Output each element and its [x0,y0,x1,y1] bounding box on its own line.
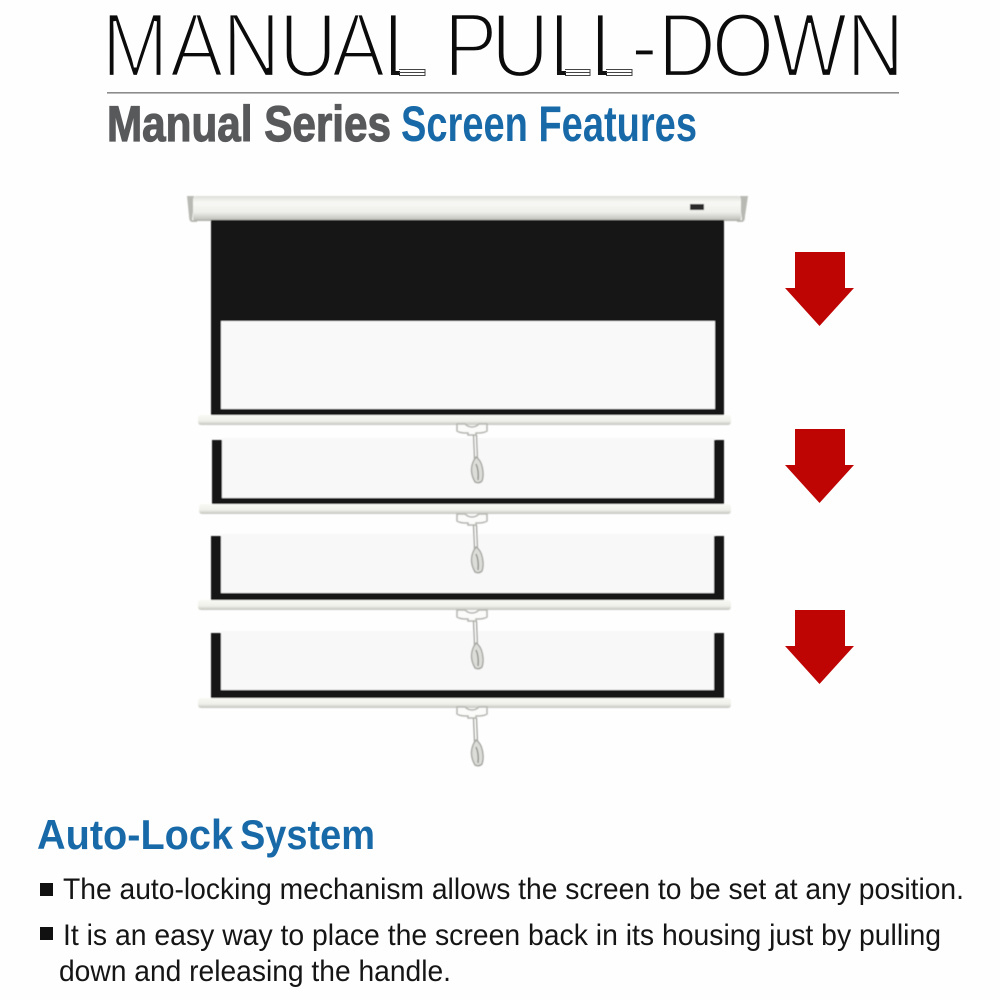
bullet 2: It is an easy way to place the screen back in its housing just by pulling [63,919,941,952]
arrow 3 [785,610,854,684]
subtitle [107,96,697,152]
bottom bar 2 [199,504,731,514]
white viewing surface [221,321,715,409]
arrow 1 [785,252,854,326]
arrow 2 [785,429,854,503]
screen section 4 [211,631,724,698]
bullet 1: The auto-locking mechanism allows the screen to be set at any position. [63,873,964,906]
bottom bar 3 [198,600,731,610]
heading: Auto-Lock System [37,811,375,858]
handle 4 [457,707,487,766]
projector screen illustration [187,196,748,766]
subtitle: Manual Series [107,96,391,152]
bottom bar 4 [198,698,731,708]
heading: Auto-Lock System: System [240,811,375,858]
handle 1 [457,424,487,483]
fully extended black backing [211,220,724,415]
bullet 2: down and releasing the handle. [59,955,451,988]
title rule [107,92,899,94]
screen section 2 [212,438,724,505]
screen housing [187,196,748,222]
bottom bar 1 [198,415,731,425]
heading: Auto-Lock System: Auto-Lock [37,811,234,858]
bullet 2 [40,919,941,988]
handle 3 [457,610,487,669]
subtitle: Screen Features [401,96,697,152]
handle 2 [457,514,487,573]
screen section 3 [211,534,724,601]
